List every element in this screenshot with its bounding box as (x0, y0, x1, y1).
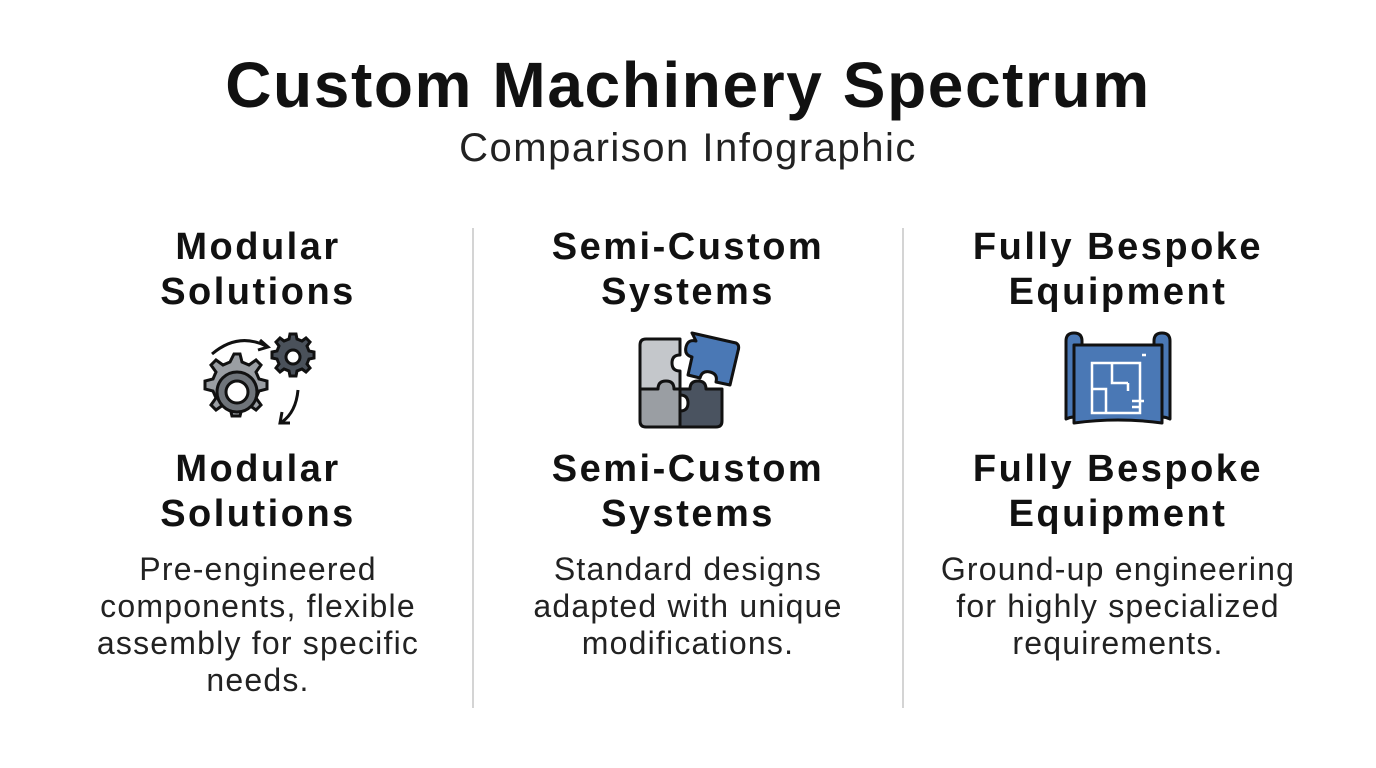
icon: puzzle (638, 332, 740, 428)
heading: semi top: Systems (601, 271, 775, 313)
description: modular: assembly for specific (97, 625, 419, 661)
description: modular: components, flexible (100, 588, 416, 624)
heading: semi top: Semi-Custom (552, 226, 824, 268)
heading: modular (160, 448, 356, 535)
panel: modular (97, 226, 419, 698)
description: bespoke: requirements. (1012, 625, 1224, 661)
description: semi (533, 551, 843, 661)
subtitle: Comparison Infographic (459, 126, 917, 170)
description: semi: modifications. (582, 625, 794, 661)
heading: semi (552, 448, 824, 535)
heading: modular top: Modular (175, 226, 341, 268)
heading: bespoke: Fully Bespoke (973, 448, 1263, 490)
heading: modular: Modular (175, 448, 341, 490)
heading: bespoke top: Fully Bespoke (973, 226, 1263, 268)
heading: bespoke top (973, 226, 1263, 313)
description: bespoke: Ground-up engineering (941, 551, 1295, 587)
description: modular: needs. (206, 662, 310, 698)
description: bespoke: for highly specialized (956, 588, 1280, 624)
panel: semi-custom (533, 226, 843, 661)
icon: gears (204, 332, 316, 424)
heading: semi: Semi-Custom (552, 448, 824, 490)
heading: modular top (160, 226, 356, 313)
description: modular: Pre-engineered (139, 551, 377, 587)
heading: modular top: Solutions (160, 271, 356, 313)
heading: semi top (552, 226, 824, 313)
heading: bespoke: Equipment (1009, 493, 1227, 535)
icon: blueprint (1064, 332, 1172, 424)
description: bespoke (941, 551, 1295, 661)
description: semi: adapted with unique (533, 588, 843, 624)
heading: bespoke (973, 448, 1263, 535)
heading: modular: Solutions (160, 493, 356, 535)
panel: bespoke (941, 226, 1295, 661)
title: Custom Machinery Spectrum (225, 49, 1151, 121)
heading: bespoke top: Equipment (1009, 271, 1227, 313)
description: semi: Standard designs (554, 551, 822, 587)
heading: semi: Systems (601, 493, 775, 535)
description: modular (97, 551, 419, 698)
